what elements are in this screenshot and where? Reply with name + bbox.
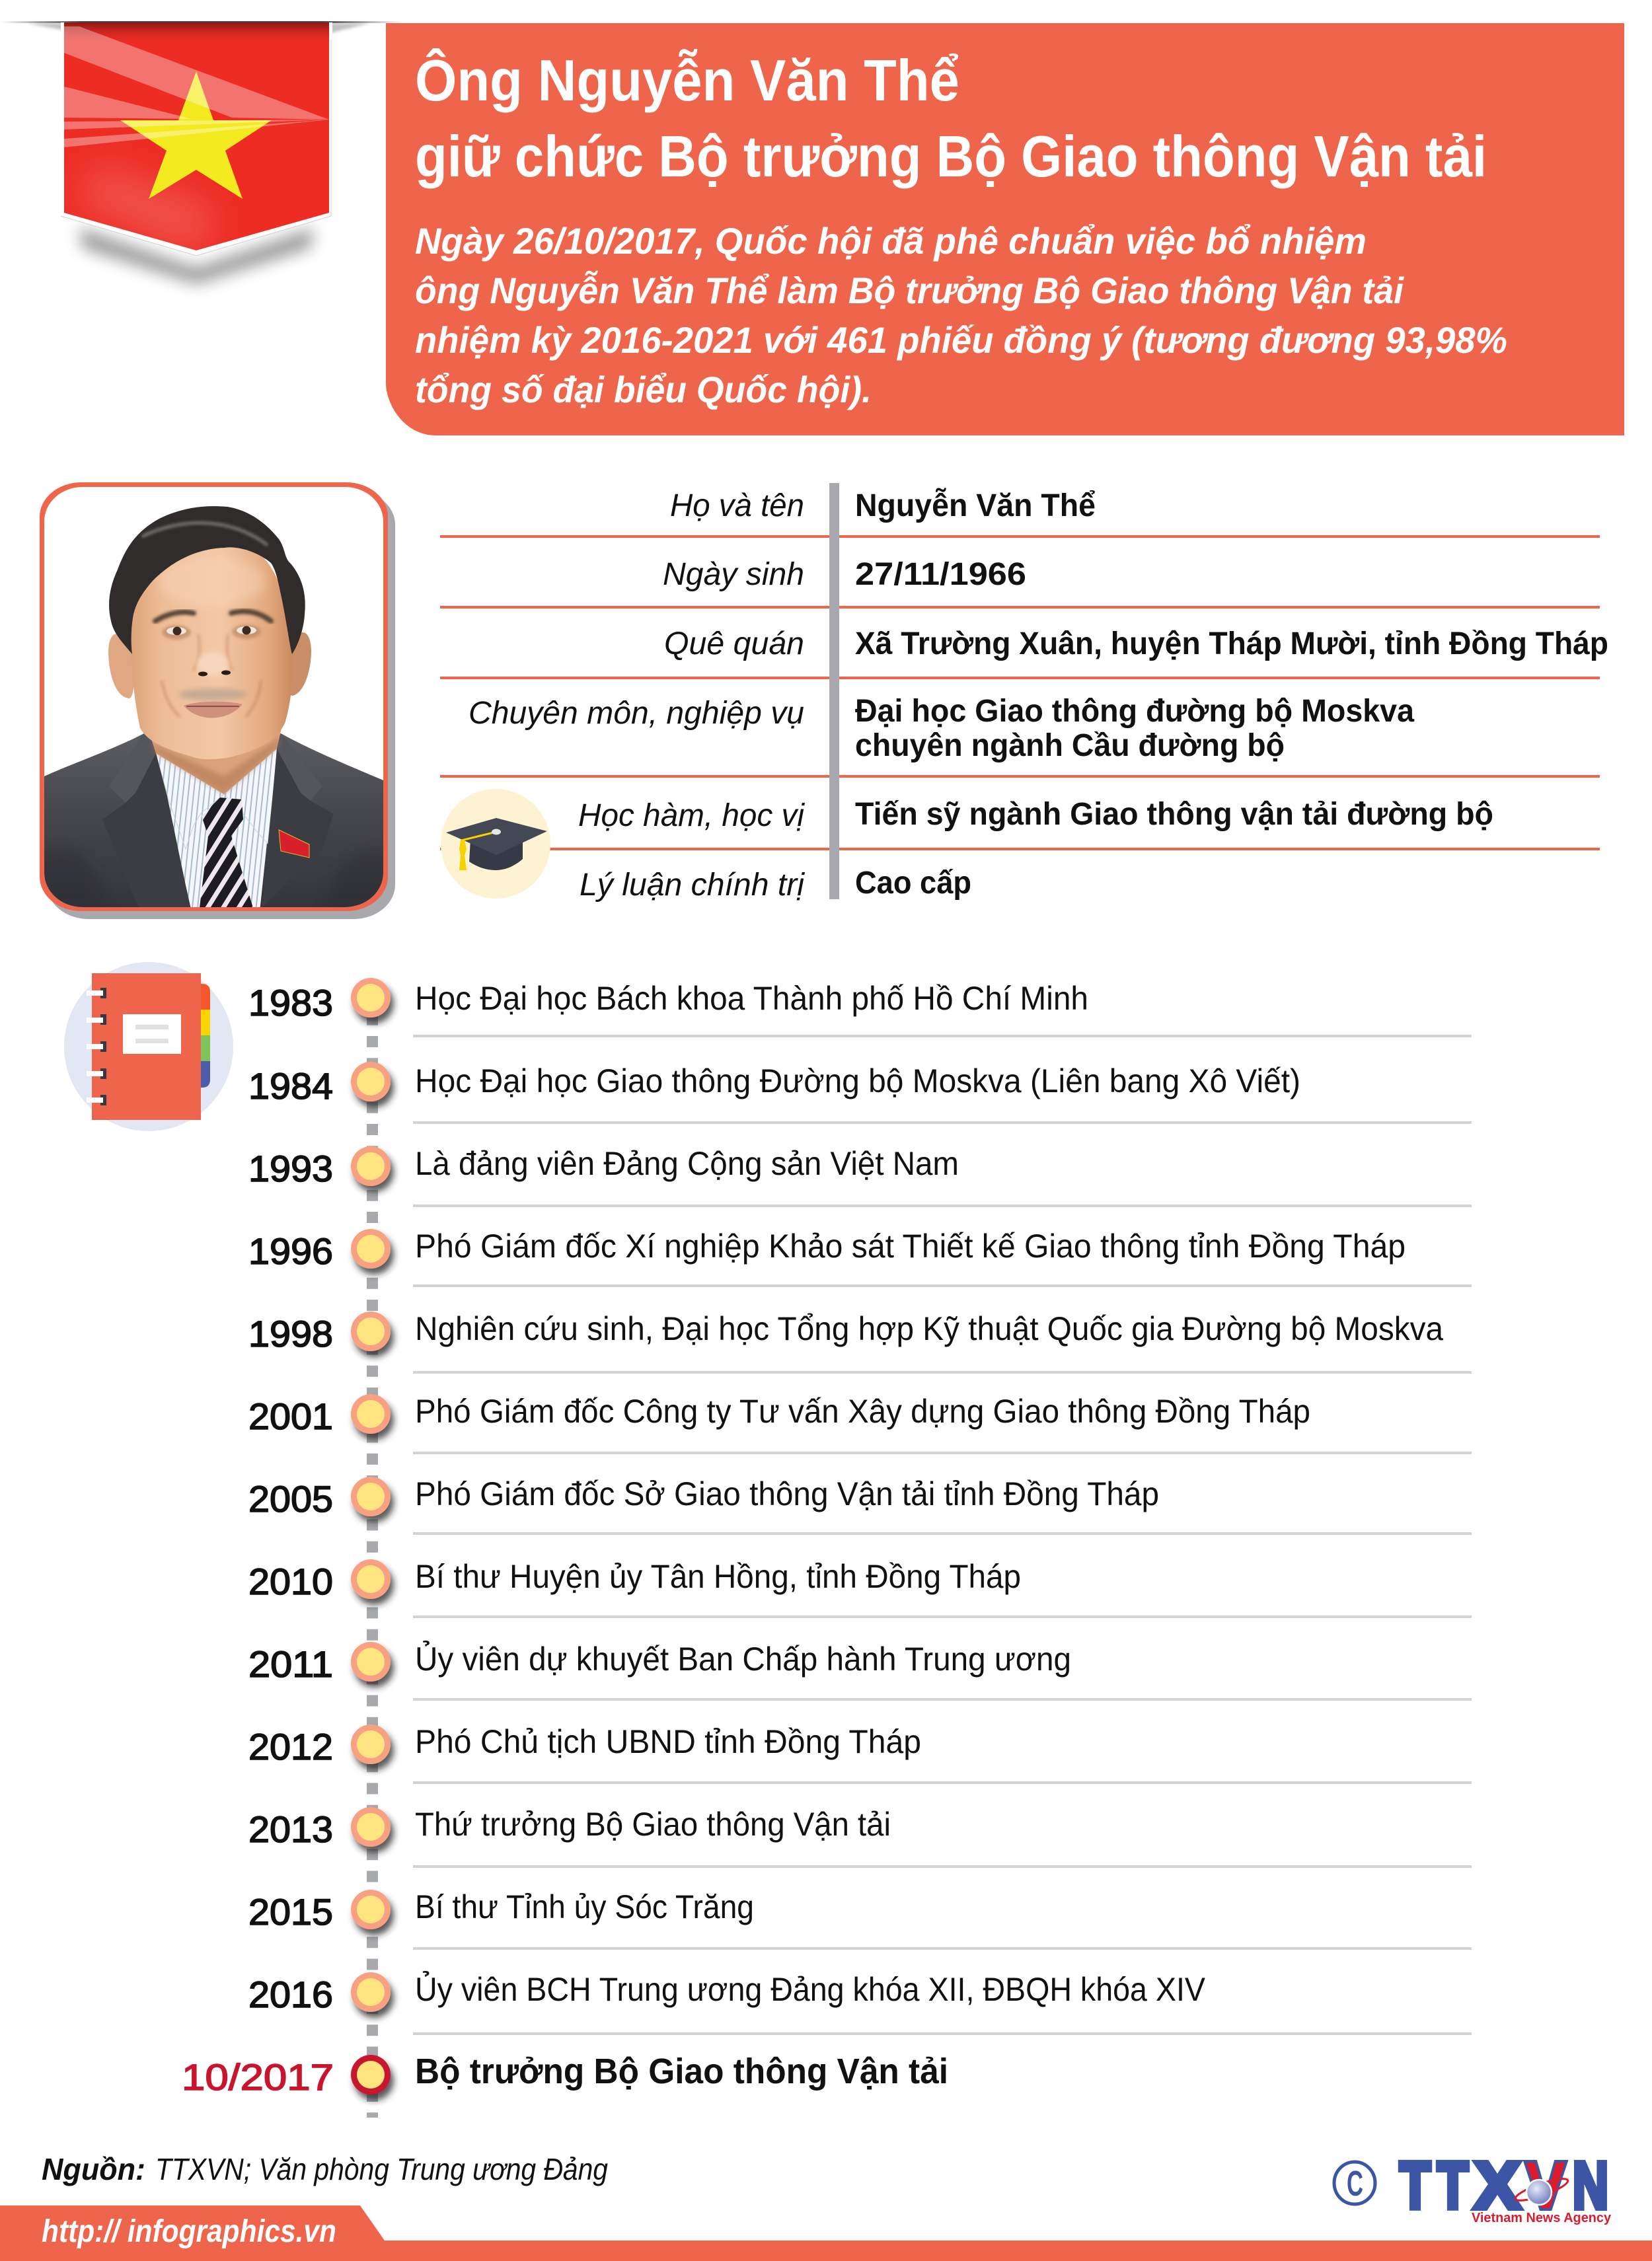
years: 1993 [248, 1148, 333, 1189]
table labels: Chuyên môn, nghiệp vụ [469, 696, 804, 731]
mouth [184, 702, 243, 718]
years: 1983 [248, 982, 333, 1023]
logo: TTXVN: T [1400, 2149, 1431, 2223]
table values: chuyên ngành Cầu đường bộ [855, 728, 1285, 763]
timeline events: Học Đại học Bách khoa Thành phố Hồ Chí Minh [415, 980, 1088, 1017]
table labels: Quê quán [664, 626, 804, 661]
source note: TTXVN; Văn phòng Trung ương Đảng [155, 2152, 608, 2186]
table values: Đại học Giao thông đường bộ Moskva [855, 694, 1414, 729]
icon: graduation cap [441, 789, 550, 899]
timeline dots [351, 978, 391, 2094]
moustache [178, 688, 247, 700]
lapels [103, 733, 188, 894]
profile table [440, 483, 1608, 903]
logo: TTXVN: T [1437, 2149, 1468, 2223]
hair [109, 506, 305, 654]
suit [40, 733, 390, 912]
table labels: Ngày sinh [663, 557, 804, 592]
flag ribbon [0, 21, 403, 284]
timeline events: Phó Giám đốc Công ty Tư vấn Xây dựng Giao thông Đồng Tháp [415, 1393, 1310, 1430]
timeline events: Bí thư Huyện ủy Tân Hồng, tỉnh Đồng Tháp [415, 1558, 1021, 1595]
timeline events [415, 980, 1443, 2091]
subtitle [415, 220, 1507, 410]
subtitle: nhiệm kỳ 2016-2021 với 461 phiếu đồng ý (tương đương 93,98% [415, 319, 1507, 361]
years: 1984 [248, 1065, 333, 1107]
icon: notebook [64, 962, 233, 1131]
timeline events: Phó Giám đốc Xí nghiệp Khảo sát Thiết kế Giao thông tỉnh Đồng Tháp [415, 1228, 1406, 1265]
agency name: Vietnam News Agency [1472, 2211, 1612, 2225]
years: 2011 [248, 1643, 333, 1685]
timeline events: Ủy viên dự khuyết Ban Chấp hành Trung ương [415, 1640, 1071, 1678]
logo: TTXVN [1400, 2149, 1612, 2225]
years: 2005 [248, 1478, 333, 1520]
title: Ông Nguyễn Văn Thể [415, 48, 959, 113]
table values: 27/11/1966 [855, 557, 1026, 592]
table values: Xã Trường Xuân, huyện Tháp Mười, tỉnh Đồng Tháp [855, 626, 1608, 661]
timeline events: Ủy viên BCH Trung ương Đảng khóa XII, ĐBQH khóa XIV [415, 1970, 1206, 2008]
subtitle: tổng số đại biểu Quốc hội). [415, 369, 872, 410]
nose [193, 634, 233, 671]
years: 2013 [248, 1808, 333, 1850]
star [120, 71, 272, 199]
table values [855, 488, 1608, 901]
years: 1996 [248, 1230, 333, 1272]
timeline events: Nghiên cứu sinh, Đại học Tổng hợp Kỹ thuật Quốc gia Đường bộ Moskva [415, 1310, 1443, 1347]
timeline events: Học Đại học Giao thông Đường bộ Moskva (Liên bang Xô Viết) [415, 1062, 1300, 1099]
years: 2016 [248, 1974, 333, 2015]
years [182, 982, 334, 2098]
table labels: Lý luận chính trị [580, 868, 805, 903]
years: 2012 [248, 1726, 333, 1767]
row separators [413, 1035, 1472, 2035]
table values: Nguyễn Văn Thể [855, 488, 1096, 523]
logo: TTXVN: N [1573, 2149, 1608, 2223]
timeline events: Thứ trưởng Bộ Giao thông Vận tải [415, 1806, 891, 1843]
timeline events: Bộ trưởng Bộ Giao thông Vận tải [415, 2052, 948, 2091]
subtitle: Ngày 26/10/2017, Quốc hội đã phê chuẩn việc bổ nhiệm [415, 220, 1367, 262]
timeline events: Phó Giám đốc Sở Giao thông Vận tải tỉnh Đồng Tháp [415, 1475, 1159, 1512]
timeline events: Phó Chủ tịch UBND tỉnh Đồng Tháp [415, 1723, 921, 1760]
years: 2001 [248, 1395, 333, 1437]
logo: copyright mark: C [1347, 2164, 1363, 2204]
table values: Cao cấp [855, 866, 971, 901]
years: 10/2017 [182, 2056, 334, 2098]
table values: Tiến sỹ ngành Giao thông vận tải đường bộ [855, 797, 1493, 832]
years: 2015 [248, 1891, 333, 1933]
tie [200, 797, 253, 908]
table labels: Họ và tên [670, 488, 804, 523]
years: 2010 [248, 1561, 333, 1602]
subtitle: ông Nguyễn Văn Thể làm Bộ trưởng Bộ Giao thông Vận tải [415, 270, 1404, 311]
source note: Nguồn: [42, 2152, 145, 2186]
header panel [386, 23, 1624, 435]
timeline events: Là đảng viên Đảng Cộng sản Việt Nam [415, 1145, 959, 1182]
eyebrows [155, 612, 194, 621]
table labels [469, 488, 805, 903]
title: giữ chức Bộ trưởng Bộ Giao thông Vận tải [415, 124, 1487, 189]
years: 1998 [248, 1313, 333, 1354]
timeline dashed line [367, 992, 378, 2118]
title [415, 48, 1487, 189]
timeline events: Bí thư Tỉnh ủy Sóc Trăng [415, 1888, 754, 1925]
party pin [279, 830, 309, 858]
portrait photo frame [40, 482, 395, 919]
website url: http:// infographics.vn [42, 2214, 336, 2249]
shirt [160, 770, 267, 907]
logo: TTXVN: X [1474, 2149, 1521, 2223]
neck [152, 729, 282, 794]
timeline [182, 978, 1472, 2118]
logo: TTXVN: V [1526, 2149, 1565, 2223]
footer bar [0, 2205, 1652, 2261]
eyes [162, 625, 191, 640]
logo: copyright mark [1334, 2162, 1375, 2204]
face [131, 537, 293, 759]
ears [108, 634, 134, 698]
table labels: Học hàm, học vị [578, 798, 805, 833]
